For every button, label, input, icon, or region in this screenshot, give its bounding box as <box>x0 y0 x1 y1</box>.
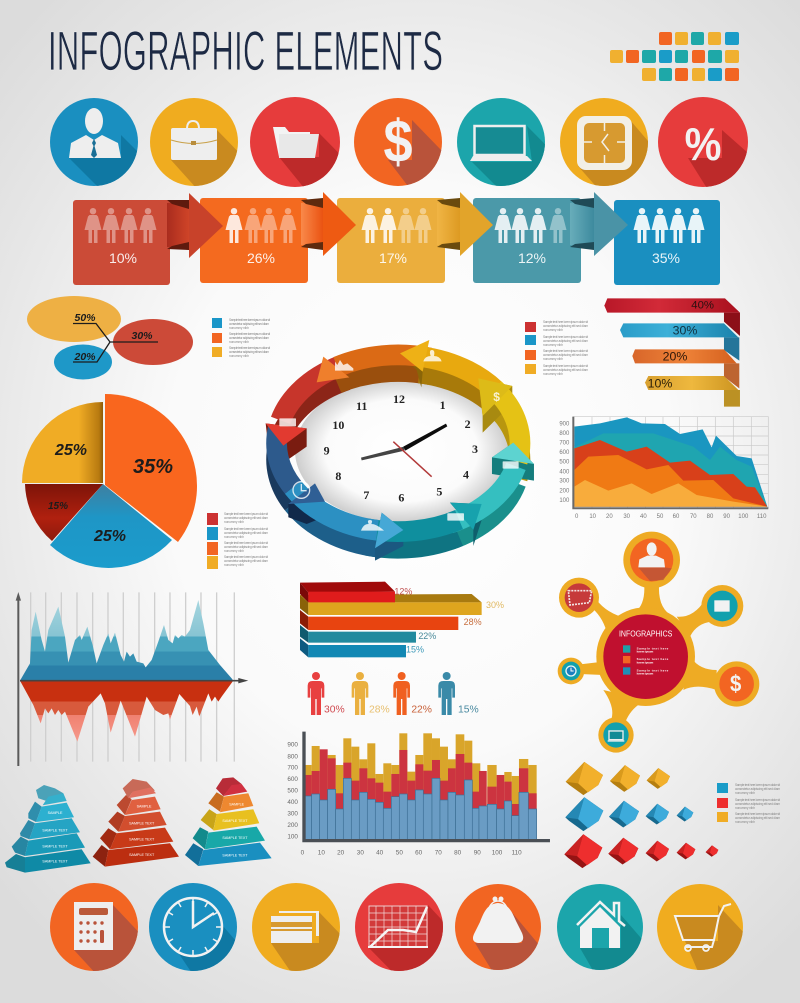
icon: shopping cart <box>657 884 743 970</box>
node: laptop <box>603 722 629 748</box>
icon: businessman <box>50 98 138 186</box>
pyramid: blue: SAMPLE TEXT <box>42 844 68 848</box>
connectors and node rings <box>558 532 759 753</box>
legend: pie chart: Sample text here lorem ipsum dolor sit <box>224 555 268 559</box>
icon: percent: % <box>685 119 721 171</box>
label: 30%: 30% <box>131 330 153 342</box>
y axis labels: 800 <box>559 431 570 437</box>
legend: pie chart: nonummy nibh <box>224 549 244 553</box>
legend: pie chart: consectetur adipiscing elit sed diam <box>224 545 268 549</box>
pyramid: blue <box>5 785 91 873</box>
box: 17% <box>337 198 445 283</box>
node: briefcase <box>707 591 738 621</box>
label: 25% yellow: 25% <box>54 442 87 459</box>
x axis labels: 110 <box>512 850 522 857</box>
pyramid: blue: SAMPLE TEXT <box>42 859 68 863</box>
person: 28%: 28% <box>369 705 390 716</box>
title: INFOGRAPHIC ELEMENTS <box>48 19 443 82</box>
slice: yellow 25% <box>22 402 103 483</box>
legend: clock: nonummy nibh <box>543 328 563 332</box>
legend: ellipse diagram: Sample text here lorem ipsum dolor sit <box>229 318 270 322</box>
arrow: step 2 to 3 <box>301 192 356 256</box>
arrow: step 4 to 5 <box>570 192 628 256</box>
icon: house <box>557 884 643 970</box>
x axis labels: 70 <box>435 850 442 857</box>
pie chart <box>22 394 197 568</box>
pyramid: blue: SAMPLE TEXT <box>42 829 68 833</box>
x axis labels: 110 <box>757 514 767 520</box>
icon: purse <box>455 884 541 970</box>
area: red <box>574 440 767 507</box>
legend: pie chart: nonummy nibh <box>224 563 244 567</box>
legend: cubes: Sample text here lorem ipsum dolor sit <box>735 783 780 787</box>
x axis labels: 20 <box>337 850 345 857</box>
legend: ellipse diagram: consectetur adipiscing elit sed diam <box>229 350 269 354</box>
icon: briefcase <box>150 98 238 186</box>
y axis labels: 200 <box>287 822 298 829</box>
person: 22% <box>393 672 432 716</box>
legend: ellipse diagram: nonummy nibh <box>229 354 249 358</box>
icon: dollar: $ <box>384 108 412 175</box>
clock numbers: 4 <box>463 468 469 482</box>
legend: cubes <box>717 783 780 824</box>
legend: pie chart: consectetur adipiscing elit sed diam <box>224 516 268 520</box>
box: 26% <box>200 198 308 283</box>
legend: clock: Sample text here lorem ipsum dolor sit <box>543 335 588 339</box>
center circle <box>603 614 688 699</box>
pyramid: red: SAMPLE TEXT <box>129 821 155 825</box>
legend: ellipse diagram: nonummy nibh <box>229 340 249 344</box>
arrow heads <box>266 340 534 548</box>
legend: pie chart <box>207 512 268 569</box>
person: 15% <box>438 672 479 716</box>
slice: blue 25% <box>50 484 172 568</box>
y axis labels <box>559 421 570 504</box>
box: 12%: 12% <box>518 250 546 266</box>
chart grid <box>573 417 768 508</box>
ring icons: $ <box>493 390 500 404</box>
icon: line chart <box>355 883 443 971</box>
slice: red 15% <box>25 484 103 541</box>
x axis labels: 10 <box>318 850 325 857</box>
clock hands <box>361 424 447 477</box>
bar chart axes <box>304 732 550 841</box>
x axis labels: 40 <box>640 514 647 520</box>
legend: clock: Sample text here lorem ipsum dolor sit <box>543 349 588 353</box>
clock numbers: 3 <box>472 442 478 456</box>
box: 35% <box>614 200 720 285</box>
colored squares decoration <box>610 32 739 81</box>
area: blue <box>574 417 767 507</box>
waveform: red lower <box>20 681 233 742</box>
clock numbers: 1 <box>440 398 446 412</box>
gold series <box>304 733 537 840</box>
ellipse: 20% <box>54 344 112 380</box>
legend: clock: Sample text here lorem ipsum dolor sit <box>543 320 588 324</box>
clock numbers <box>324 392 478 504</box>
node: clock <box>562 662 580 680</box>
chart axes <box>573 417 768 508</box>
box: 12% <box>473 198 581 283</box>
legend: ellipse diagram: Sample text here lorem ipsum dolor sit <box>229 346 270 350</box>
ribbon: 40%: 40% <box>691 300 714 312</box>
legend: pie chart: consectetur adipiscing elit sed diam <box>224 559 268 563</box>
connector lines <box>73 324 158 362</box>
label: 25% blue: 25% <box>93 528 126 545</box>
legend: ellipse diagram: consectetur adipiscing elit sed diam <box>229 336 269 340</box>
cubes <box>564 762 718 868</box>
pyramid: rainbow: SAMPLE TEXT <box>222 819 248 823</box>
y axis labels: 700 <box>559 441 570 447</box>
legend: ellipse diagram: consectetur adipiscing elit sed diam <box>229 322 269 326</box>
legend: pie chart: consectetur adipiscing elit sed diam <box>224 531 268 535</box>
arrow segment: red <box>281 363 347 420</box>
legend: cubes: nonummy nibh <box>735 820 755 824</box>
x axis labels: 80 <box>454 850 462 857</box>
ellipse: 50% <box>27 296 121 342</box>
label: 20%: 20% <box>73 351 96 363</box>
legend: cubes: consectetur adipiscing elit sed diam <box>735 816 780 820</box>
box: 17%: 17% <box>379 250 407 266</box>
waveform chart <box>16 592 248 766</box>
pyramid: rainbow <box>185 777 272 866</box>
area chart <box>559 417 768 520</box>
y axis labels: 300 <box>287 811 298 818</box>
x axis labels: 0 <box>575 514 579 520</box>
y axis labels: 300 <box>559 479 570 485</box>
y axis labels: 800 <box>287 753 298 760</box>
clock numbers: 12 <box>393 392 405 406</box>
cubes: gold row <box>566 762 670 795</box>
y axis labels: 500 <box>559 460 570 466</box>
label: 15%: 15% <box>48 501 68 512</box>
legend: clock <box>525 320 588 376</box>
y axis labels: 100 <box>559 498 570 504</box>
bar: 12% red <box>300 582 395 602</box>
legend: clock: consectetur adipiscing elit sed diam <box>543 324 588 328</box>
center list: Sample text here <box>637 668 669 672</box>
pyramid: rainbow: SAMPLE TEXT <box>222 836 248 840</box>
legend: cubes: nonummy nibh <box>735 791 755 795</box>
legend: cubes: Sample text here lorem ipsum dolor sit <box>735 812 780 816</box>
legend: clock: consectetur adipiscing elit sed diam <box>543 353 588 357</box>
ring walls <box>277 372 520 548</box>
x axis labels: 30 <box>623 514 631 520</box>
legend: ellipse diagram: Sample text here lorem ipsum dolor sit <box>229 332 270 336</box>
clock numbers: 6 <box>398 490 404 504</box>
clock numbers: 10 <box>332 418 344 432</box>
icon: credit cards <box>252 883 340 971</box>
y axis labels: 200 <box>559 488 570 494</box>
arrow segment: teal <box>367 520 459 532</box>
waveform grid <box>31 592 234 762</box>
y axis labels: 700 <box>287 765 298 772</box>
bar: 15% blue <box>300 638 406 657</box>
pyramid: rainbow: SAMPLE TEXT <box>222 854 248 858</box>
y axis labels: 900 <box>559 421 570 427</box>
legend: pie chart: nonummy nibh <box>224 535 244 539</box>
pyramid: red: SAMPLE TEXT <box>129 853 155 857</box>
y axis labels: 400 <box>559 469 570 475</box>
bar: 30% gold <box>300 594 482 615</box>
y axis labels: 500 <box>287 788 298 795</box>
legend: clock: nonummy nibh <box>543 357 563 361</box>
ellipse: 30% <box>113 319 193 365</box>
ring icons <box>279 350 519 531</box>
x axis labels: 100 <box>738 514 749 520</box>
x axis labels: 20 <box>606 514 613 520</box>
x axis labels <box>575 514 767 520</box>
ribbon: 10%: 10% <box>648 376 672 390</box>
box: 10% <box>73 200 170 285</box>
label: 35%: 35% <box>133 456 173 478</box>
legend: clock: nonummy nibh <box>543 343 563 347</box>
arrow segment: orange <box>337 355 430 367</box>
bar: 22% teal <box>300 625 416 643</box>
ribbon bars <box>604 298 740 407</box>
cubes: blue row <box>565 797 693 831</box>
label: 50%: 50% <box>74 312 96 324</box>
arrow segment: gold <box>419 356 504 399</box>
box: 26%: 26% <box>247 250 275 266</box>
ribbon: 30%: 30% <box>673 323 697 337</box>
icon: folder <box>250 97 340 187</box>
pyramid: rainbow: SAMPLE <box>229 803 245 807</box>
icon: wall clock <box>560 98 648 186</box>
bar labels <box>394 586 504 654</box>
y axis labels: 600 <box>559 450 570 456</box>
x axis labels: 40 <box>376 850 384 857</box>
center list: lorem ipsum <box>637 650 654 654</box>
area: teal <box>574 433 767 507</box>
icon: percent <box>658 97 748 187</box>
person: 22%: 22% <box>411 705 432 716</box>
box: 10%: 10% <box>109 250 137 266</box>
center list: lorem ipsum <box>637 672 654 676</box>
ellipse diagram <box>27 296 193 380</box>
legend: pie chart: Sample text here lorem ipsum dolor sit <box>224 527 268 531</box>
legend: clock: consectetur adipiscing elit sed diam <box>543 368 588 372</box>
legend: pie chart: Sample text here lorem ipsum dolor sit <box>224 512 268 516</box>
bar labels: 12% <box>394 586 412 596</box>
clock face <box>295 379 508 522</box>
clock numbers: 5 <box>436 485 442 499</box>
center list <box>623 645 669 676</box>
y axis labels <box>287 742 298 840</box>
icon: clock <box>149 883 237 971</box>
legend: cubes: consectetur adipiscing elit sed diam <box>735 787 780 791</box>
x axis labels: 70 <box>690 514 697 520</box>
pyramids <box>5 777 272 873</box>
person: 30% <box>308 672 345 716</box>
x axis labels: 60 <box>673 514 680 520</box>
network diagram <box>558 532 759 753</box>
arrow segment: dark blue <box>277 428 293 487</box>
clock numbers: 8 <box>335 469 341 483</box>
y axis labels: 900 <box>287 742 298 749</box>
pyramid: blue: SAMPLE <box>48 811 63 815</box>
3D horizontal bars and people <box>300 582 504 716</box>
ring head walls <box>478 378 512 433</box>
area: orange <box>574 455 767 507</box>
cubes: red row <box>564 834 718 868</box>
arrow: step 1 to 2 <box>167 193 223 258</box>
x axis labels: 100 <box>492 850 503 857</box>
x axis labels: 10 <box>589 514 597 520</box>
x axis labels: 80 <box>707 514 714 520</box>
blue series <box>304 778 537 840</box>
x axis labels: 60 <box>415 850 423 857</box>
legend: pie chart: nonummy nibh <box>224 520 244 524</box>
vertical axis arrow <box>16 592 21 766</box>
horizontal axis arrow <box>20 678 248 683</box>
x axis labels: 90 <box>723 514 731 520</box>
legend: clock: consectetur adipiscing elit sed diam <box>543 339 588 343</box>
legend: ellipse diagram: nonummy nibh <box>229 326 249 330</box>
process step boxes <box>73 192 720 285</box>
y axis labels: 400 <box>287 799 298 806</box>
x axis labels: 50 <box>396 850 403 857</box>
area: light orange <box>574 480 767 507</box>
clock with arrow ring <box>266 340 534 561</box>
center list: Sample text here <box>637 657 669 661</box>
icon: calculator <box>50 883 138 971</box>
bar: 28% orange <box>300 610 458 630</box>
bar labels: 15% <box>406 644 424 654</box>
red series <box>304 749 537 840</box>
pyramid: red: SAMPLE <box>137 804 152 808</box>
arrow: step 3 to 4 <box>437 192 493 256</box>
clock numbers: 11 <box>356 399 367 413</box>
center list: Sample text here <box>637 646 669 650</box>
y axis labels: 600 <box>287 776 298 783</box>
legend: ellipse diagram <box>212 318 270 358</box>
arrow segment: light yellow <box>494 389 520 462</box>
person: 28% <box>352 672 390 716</box>
slice: orange 35% <box>105 394 197 542</box>
waveform: blue upper <box>20 600 233 681</box>
arrow segment: blue <box>293 487 377 530</box>
person: 30%: 30% <box>324 705 345 716</box>
bar labels: 30% <box>486 600 504 610</box>
pyramid: red: SAMPLE TEXT <box>129 838 155 842</box>
icon: laptop <box>457 98 545 186</box>
node: chart <box>565 583 593 612</box>
clock numbers: 2 <box>465 417 471 431</box>
clock numbers: 7 <box>363 488 369 502</box>
legend: cubes: Sample text here lorem ipsum dolor sit <box>735 798 780 802</box>
arrow segment: cyan <box>450 466 516 523</box>
x axis labels: 90 <box>474 850 481 857</box>
bar labels: 22% <box>418 631 436 641</box>
center list: lorem ipsum <box>637 660 654 664</box>
legend: cubes: consectetur adipiscing elit sed diam <box>735 802 780 806</box>
x axis labels: 50 <box>657 514 664 520</box>
legend: cubes: nonummy nibh <box>735 806 755 810</box>
legend: pie chart: Sample text here lorem ipsum dolor sit <box>224 541 268 545</box>
x axis labels: 0 <box>301 850 305 857</box>
y axis labels: 100 <box>287 833 298 840</box>
node: dollar <box>719 667 754 701</box>
stacked bar chart <box>287 732 550 857</box>
clock numbers: 9 <box>324 444 330 458</box>
box: 35%: 35% <box>652 250 680 266</box>
legend: clock: nonummy nibh <box>543 372 563 376</box>
pyramid: red <box>93 779 179 867</box>
bar labels: 28% <box>464 617 482 627</box>
node: person <box>630 538 673 582</box>
person: 15%: 15% <box>458 705 479 716</box>
icon: dollar <box>354 98 442 186</box>
x axis labels: 30 <box>357 850 364 857</box>
x axis labels <box>301 850 522 857</box>
center heading: INFOGRAPHICS <box>619 629 672 638</box>
node: dollar: $ <box>730 671 742 697</box>
ribbon: 20%: 20% <box>663 349 687 363</box>
legend: clock: Sample text here lorem ipsum dolor sit <box>543 364 588 368</box>
